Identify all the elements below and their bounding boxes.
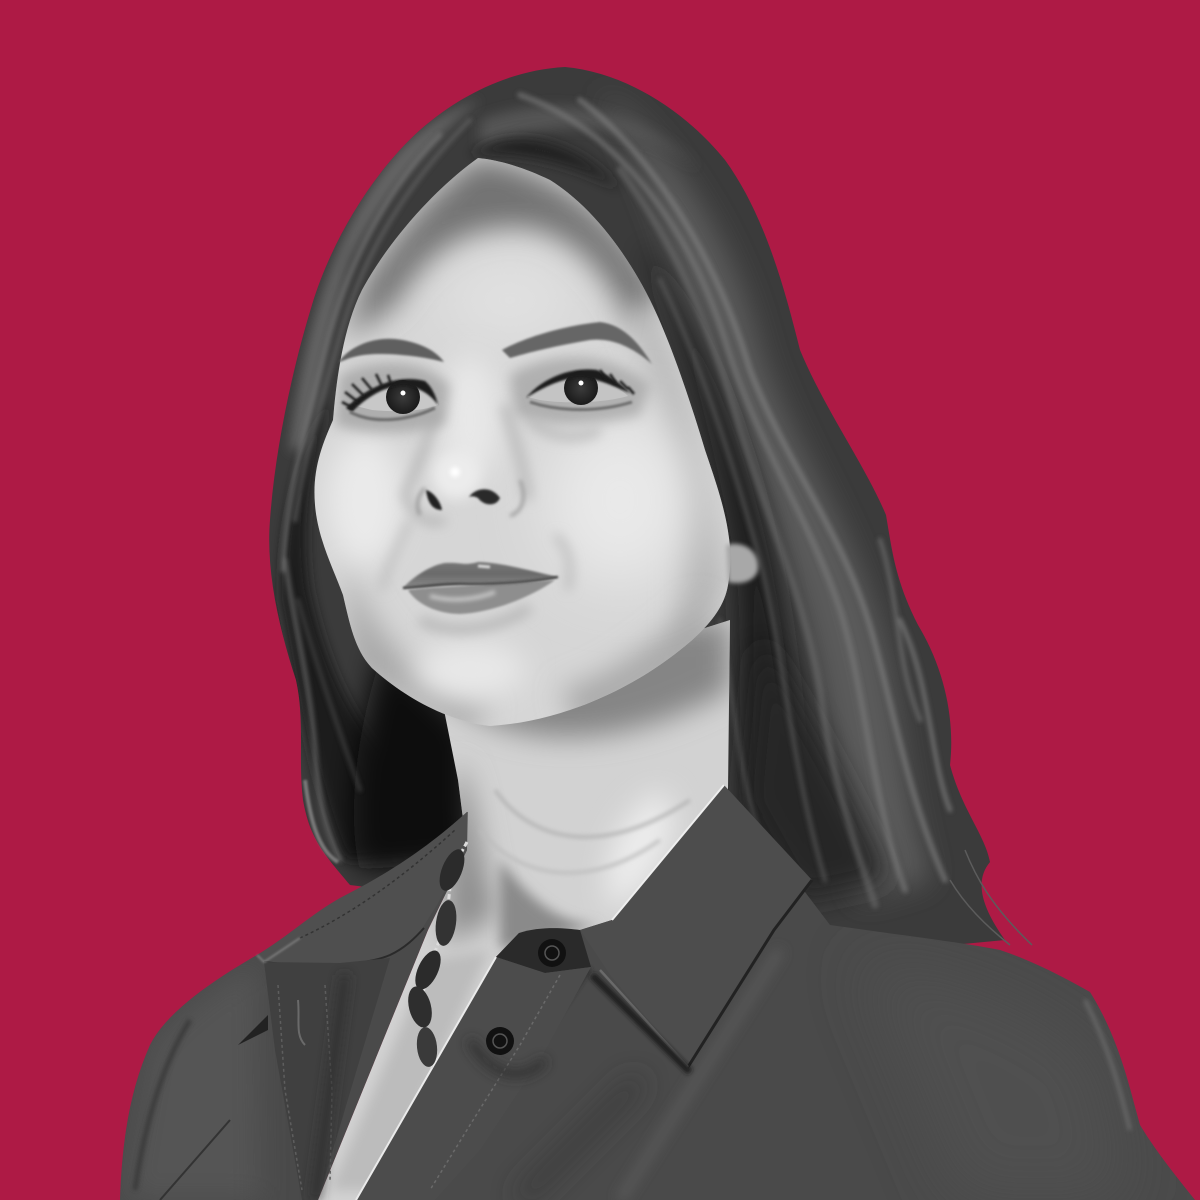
nose side shadow [405, 410, 445, 522]
lips [403, 562, 558, 614]
hairline shadow [345, 158, 660, 340]
eye socket shading [335, 363, 450, 432]
nose [418, 451, 523, 516]
collar stand [496, 928, 591, 973]
hair [269, 67, 1032, 950]
shirt [120, 785, 1195, 1200]
necklace [404, 842, 470, 1068]
highlights [440, 260, 580, 340]
ear [726, 544, 758, 583]
left lapel [264, 958, 390, 1200]
eyebrows [338, 322, 652, 364]
placket [356, 957, 591, 1200]
loose strands [950, 850, 1032, 945]
shirt folds [125, 950, 1130, 1200]
left eye [342, 374, 438, 420]
right eye [526, 369, 634, 410]
right collar [580, 785, 812, 1072]
left collar [257, 812, 467, 1200]
face [314, 158, 730, 735]
buttons [486, 939, 566, 1055]
neck and chest [318, 620, 730, 1200]
